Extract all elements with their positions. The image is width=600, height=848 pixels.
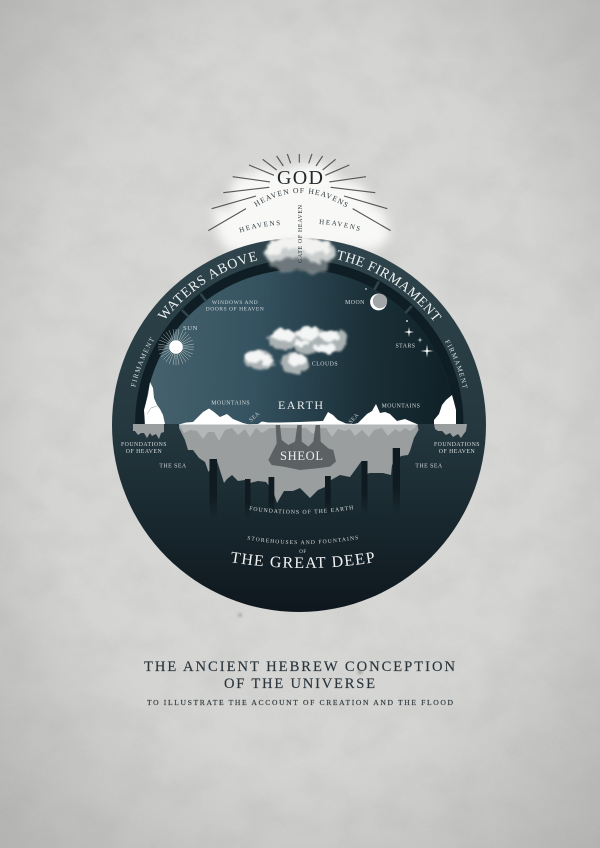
- right firmament pillar and ice: [434, 395, 467, 438]
- icon: sun: [158, 329, 194, 365]
- sky dome: [144, 270, 454, 424]
- label: sun: SUN: [183, 325, 198, 332]
- label: mountains right: MOUNTAINS: [382, 404, 420, 410]
- label: foundations of heaven left: OF HEAVEN: [126, 449, 163, 455]
- label: the great deep: THE GREAT DEEP: [232, 552, 374, 568]
- label: windows and doors of heaven: DOORS OF HEAVEN: [206, 306, 264, 312]
- title line two: OF THE UNIVERSE: [224, 676, 375, 692]
- hanging ice drips: [179, 424, 417, 441]
- the firmament label: THE FIRMAMENT: [338, 250, 442, 321]
- label: the sea left: THE SEA: [159, 464, 187, 470]
- label: foundations of heaven right: OF HEAVEN: [439, 449, 476, 455]
- label: clouds: CLOUDS: [312, 362, 338, 368]
- firmament left label: FIRMAMENT: [130, 337, 154, 388]
- sheol cavern: [268, 425, 336, 470]
- clouds at gate of heaven: [265, 237, 337, 273]
- firmament and deep body: [112, 238, 486, 612]
- left firmament pillar and ice: [133, 382, 165, 439]
- label: gate of heaven: GATE OF HEAVEN: [298, 204, 304, 263]
- god rays: [208, 154, 391, 231]
- heading: GOD: GOD: [277, 167, 323, 189]
- label: sheol: SHEOL: [280, 449, 323, 463]
- icon: moon: [370, 294, 387, 310]
- label: foundations of the earth: FOUNDATIONS OF THE EARTH: [249, 505, 354, 514]
- label: the sea right: THE SEA: [415, 464, 443, 470]
- label: earth: EARTH: [278, 398, 323, 412]
- label: heavens left: HEAVENS: [238, 220, 280, 232]
- label: foundations of heaven left: FOUNDATIONS: [121, 442, 167, 448]
- title: [144, 659, 455, 707]
- label: heavens right: HEAVENS: [319, 219, 360, 231]
- label: stars: STARS: [395, 344, 416, 350]
- foundation pillars of the earth: [210, 448, 400, 519]
- label: heaven of heavens: HEAVEN OF HEAVENS: [254, 188, 348, 207]
- title line one: THE ANCIENT HEBREW CONCEPTION: [144, 659, 455, 675]
- label: foundations of heaven right: FOUNDATIONS: [434, 442, 480, 448]
- label: windows and doors of heaven: WINDOWS AND: [212, 300, 258, 306]
- subtitle: TO ILLUSTRATE THE ACCOUNT OF CREATION AND THE FLOOD: [147, 698, 454, 707]
- label: sea left: SEA: [248, 411, 262, 423]
- heaven haze behind the dome: [211, 165, 391, 260]
- white earth surface and mountains: [179, 404, 418, 424]
- waters above label: WATERS ABOVE: [157, 252, 258, 318]
- label: mountains left: MOUNTAINS: [211, 400, 250, 406]
- dark window band: [140, 265, 459, 424]
- label: storehouses and fountains: STOREHOUSES AND FOUNTAINS: [247, 536, 358, 544]
- label: of: OF: [299, 550, 307, 555]
- label: moon: MOON: [345, 300, 365, 306]
- windows separators: [182, 282, 412, 317]
- universe disc: [112, 238, 486, 612]
- icon: stars: [365, 288, 434, 358]
- label: sea right: SEA: [348, 412, 361, 425]
- underworld grey mass: [179, 424, 418, 519]
- firmament right label: FIRMAMENT: [444, 339, 468, 388]
- clouds: [244, 327, 347, 373]
